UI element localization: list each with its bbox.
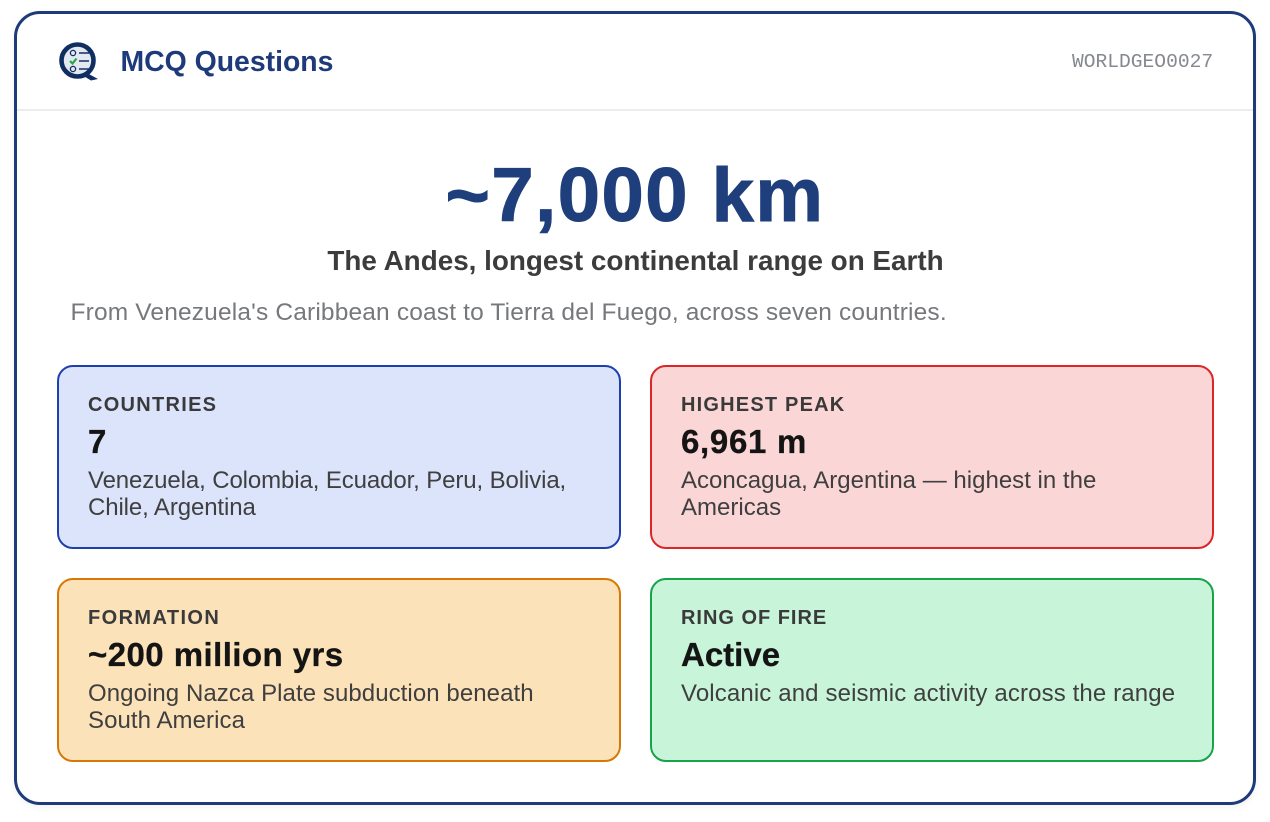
supporting text: From Venezuela's Caribbean coast to Tierra del Fuego, across seven countries. bbox=[70, 299, 947, 326]
countries description bbox=[88, 467, 566, 521]
header divider bbox=[17, 109, 1253, 111]
formation description: South America bbox=[88, 707, 245, 734]
panel: countries bbox=[57, 365, 621, 549]
brand title: MCQ Questions bbox=[120, 46, 333, 78]
logo icon bbox=[59, 42, 98, 80]
subheading: The Andes, longest continental range on Earth bbox=[327, 245, 944, 276]
highest peak description: Aconcagua, Argentina — highest in the bbox=[681, 467, 1096, 494]
formation label: FORMATION bbox=[88, 607, 220, 629]
formation description bbox=[88, 680, 534, 734]
countries value: 7 bbox=[88, 423, 106, 460]
panel: highest peak bbox=[650, 365, 1214, 549]
countries label: COUNTRIES bbox=[88, 394, 217, 416]
countries description: Chile, Argentina bbox=[88, 494, 256, 521]
ring of fire value: Active bbox=[681, 636, 780, 673]
headline number: ~7,000 km bbox=[445, 153, 825, 238]
highest peak value: 6,961 m bbox=[681, 423, 807, 460]
panel: formation bbox=[57, 578, 621, 762]
ring of fire description: Volcanic and seismic activity across the range bbox=[681, 680, 1175, 707]
highest peak label: HIGHEST PEAK bbox=[681, 394, 845, 416]
formation value: ~200 million yrs bbox=[88, 636, 344, 673]
highest peak description: Americas bbox=[681, 494, 781, 521]
formation description: Ongoing Nazca Plate subduction beneath bbox=[88, 680, 534, 707]
countries description: Venezuela, Colombia, Ecuador, Peru, Bolivia, bbox=[88, 467, 566, 494]
panel: ring of fire bbox=[650, 578, 1214, 762]
highest peak description bbox=[681, 467, 1096, 521]
ring of fire label: RING OF FIRE bbox=[681, 607, 827, 629]
question code: WORLDGEO0027 bbox=[1072, 51, 1213, 73]
